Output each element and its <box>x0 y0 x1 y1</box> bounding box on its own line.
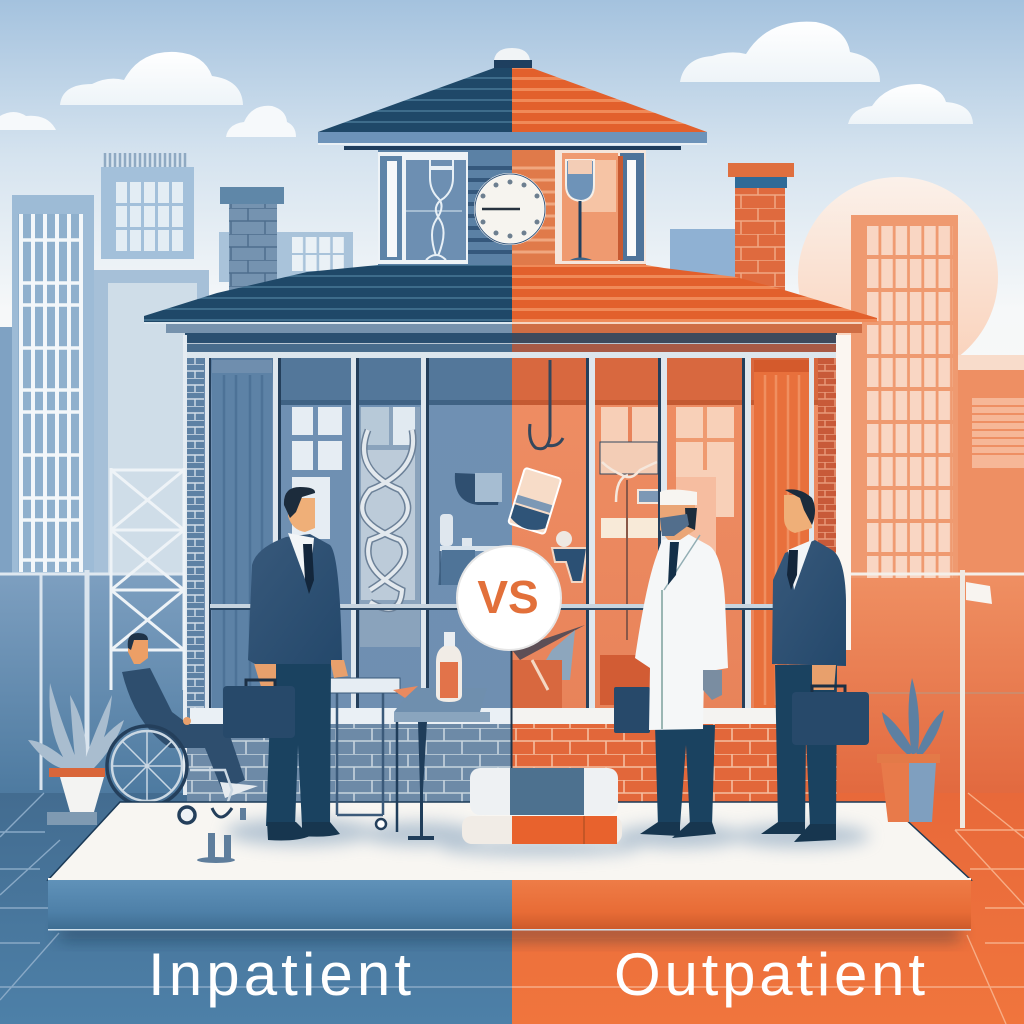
cloud: far left <box>0 112 56 130</box>
small floor clamp <box>197 833 235 863</box>
upper band left <box>280 358 512 405</box>
floating beaker <box>508 468 561 534</box>
DNA helix <box>362 430 413 609</box>
shadow below platform <box>60 926 960 940</box>
tall window behind helix <box>360 407 420 647</box>
platform front lip <box>48 929 971 930</box>
building: upper tower <box>378 150 646 266</box>
jacket <box>772 540 846 666</box>
label: outpatient: Outpatient <box>614 941 925 1008</box>
plant left <box>28 683 124 825</box>
building: orange grid <box>851 215 958 595</box>
sun circle <box>798 177 998 377</box>
main roof <box>144 265 877 333</box>
IV hanger <box>600 442 660 640</box>
cornice <box>318 132 707 150</box>
platform front right <box>512 880 971 929</box>
floor: right tiles <box>512 793 1024 1024</box>
roof slope right <box>512 68 707 132</box>
legs <box>775 665 837 826</box>
platform front left <box>48 880 512 929</box>
curtain left <box>212 360 272 708</box>
roof eave <box>144 322 862 333</box>
shoes <box>640 822 716 838</box>
building: blue block <box>670 229 736 279</box>
cloud: upper left <box>60 52 243 105</box>
building: small grid <box>219 232 353 282</box>
shoes <box>761 822 836 842</box>
roof slope left <box>318 68 512 132</box>
scaffold <box>111 468 184 690</box>
jacket <box>248 534 342 664</box>
legs <box>266 660 331 826</box>
window left: inpatient interior <box>185 353 512 713</box>
window frame bars <box>183 335 851 795</box>
shoes <box>267 822 340 840</box>
legs <box>655 725 715 826</box>
tower wall <box>378 150 646 266</box>
table with bottle <box>393 632 490 840</box>
man left <box>223 487 348 840</box>
building: orange slatted <box>958 355 1024 600</box>
hand right <box>330 660 348 678</box>
head <box>784 489 815 533</box>
hair <box>685 508 697 530</box>
face <box>660 505 695 540</box>
cloud: small left <box>226 106 296 137</box>
doctor <box>614 490 728 838</box>
VS badge <box>457 546 561 650</box>
brick column left <box>187 358 204 713</box>
doctor tie <box>668 542 679 585</box>
building: upper grid <box>101 153 194 259</box>
coat <box>635 534 728 730</box>
briefcase <box>223 680 295 738</box>
left skyline <box>0 153 353 577</box>
mask <box>660 514 689 536</box>
VS badge: VS <box>477 571 539 623</box>
cloud: upper right <box>680 22 880 82</box>
cap <box>660 490 697 505</box>
hand left <box>253 660 276 690</box>
wheel <box>107 726 187 806</box>
platform top edge cover <box>48 878 971 882</box>
shirt and tie <box>787 540 812 590</box>
main roof left <box>144 265 512 322</box>
patient <box>122 633 258 798</box>
shelf items <box>438 473 502 585</box>
building: mid block <box>94 270 209 575</box>
shirt and tie <box>288 533 314 594</box>
window right: outpatient interior <box>508 353 837 713</box>
platform top <box>48 802 971 880</box>
background panes right <box>601 407 734 557</box>
chimney: right brick <box>728 163 794 292</box>
building: far left <box>0 327 14 577</box>
right yard wall <box>836 578 1024 795</box>
right skyline <box>670 163 1024 600</box>
rolled mats <box>462 768 622 844</box>
head <box>284 487 315 532</box>
clock <box>475 174 545 244</box>
wheelchair casters <box>179 807 246 823</box>
upper band right <box>512 358 836 405</box>
fence rails <box>0 570 1024 790</box>
label: inpatient: Inpatient <box>148 941 411 1008</box>
cloud: right <box>848 84 973 124</box>
building: tall grid <box>12 195 94 575</box>
cup on shelf <box>552 531 587 582</box>
dome <box>494 48 532 69</box>
platform shadows <box>225 818 870 856</box>
sill and lower brick <box>187 650 837 802</box>
trolley <box>330 678 400 829</box>
briefcase <box>614 687 650 733</box>
bottle <box>436 632 462 702</box>
floor: left tiles <box>0 793 512 1024</box>
wall frieze <box>185 333 837 352</box>
brick column right <box>818 358 836 703</box>
table and cloth right <box>512 625 658 708</box>
main roof right <box>512 265 877 322</box>
upper roof <box>318 48 707 150</box>
curtain right <box>754 360 809 708</box>
man right <box>761 489 869 842</box>
sky background <box>0 0 1024 620</box>
flag pole <box>960 570 992 828</box>
hook <box>530 360 563 449</box>
tower window left with DNA hourglass <box>378 152 468 264</box>
window background panes left <box>292 407 342 539</box>
left yard wall <box>0 575 190 795</box>
hand <box>812 665 836 690</box>
wheelchair patient <box>107 633 258 810</box>
chimney: left <box>220 187 284 294</box>
glove <box>703 670 722 700</box>
plant right <box>877 678 944 822</box>
briefcase <box>792 686 869 745</box>
tower window right with glass <box>555 150 646 264</box>
